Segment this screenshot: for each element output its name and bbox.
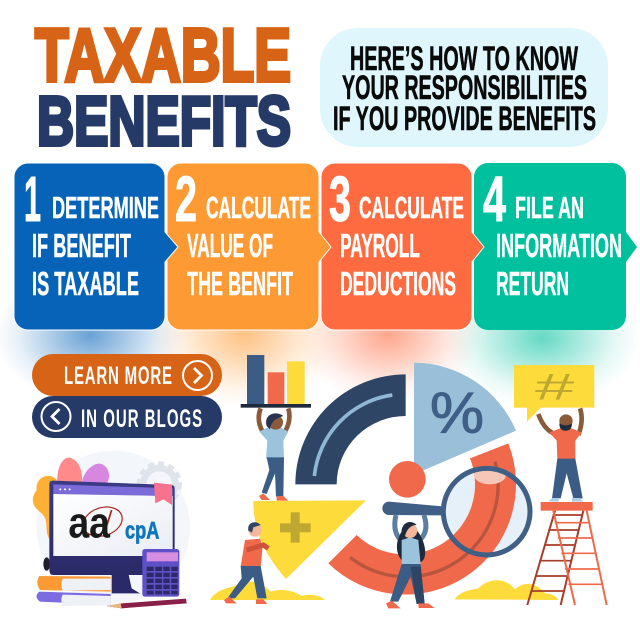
ground mounds	[210, 580, 558, 600]
yellow shield with plus	[253, 500, 366, 579]
background glow under step panels	[0, 263, 640, 407]
person on ladder holding speech bubble	[538, 408, 583, 502]
panel: step 4 file an information return: 4	[483, 163, 506, 235]
panel: step 3 calculate payroll deductions: CALCULATE	[359, 190, 464, 225]
bar chart	[241, 355, 311, 408]
panel: step 2 calculate value of the benfit: THE BENFIT	[187, 265, 293, 302]
speech bubble with hash: #	[535, 365, 575, 407]
panel: step 4 file an information return: FILE AN	[515, 190, 584, 225]
illustration: team building charts	[210, 355, 607, 608]
person holding magnifier	[386, 515, 435, 608]
panel: step 3 calculate payroll deductions: 3	[329, 163, 351, 235]
panel: step 2 calculate value of the benfit: CALCULATE	[206, 190, 311, 225]
panel: step 2 calculate value of the benfit: VALUE OF	[187, 227, 273, 264]
panel: step 1 determine if benefit is taxable: DETERMINE	[52, 190, 159, 225]
person holding bar chart	[259, 408, 289, 501]
percent pie slice: %	[430, 382, 484, 446]
dark blue arc	[295, 374, 406, 484]
button: learn more: LEARN MORE	[64, 362, 172, 390]
percent pie slice	[414, 363, 516, 474]
button: learn more	[32, 354, 222, 396]
panel: step 2 calculate value of the benfit	[167, 163, 331, 330]
logo: aa cpa: cpA	[125, 518, 159, 545]
logo: aa cpa: aa	[68, 498, 110, 547]
magnifier lens	[444, 469, 529, 554]
panel: step 1 determine if benefit is taxable: IS TAXABLE	[32, 265, 139, 302]
panel: step 1 determine if benefit is taxable: IF BENEFIT	[32, 227, 131, 264]
button: in our blogs: IN OUR BLOGS	[81, 405, 202, 433]
panel: step 3 calculate payroll deductions	[321, 163, 484, 330]
panel: step 1 determine if benefit is taxable: 1	[24, 163, 41, 235]
subtitle callout	[320, 28, 608, 147]
magnifier	[382, 468, 530, 555]
button: in our blogs	[32, 396, 222, 438]
panel: step 1 determine if benefit is taxable	[14, 163, 178, 330]
panel: step 3 calculate payroll deductions: DEDUCTIONS	[340, 265, 456, 302]
panel: step 4 file an information return	[474, 163, 637, 330]
red ring	[328, 443, 516, 595]
person pushing shield	[224, 522, 268, 604]
panel: step 2 calculate value of the benfit: 2	[175, 163, 197, 235]
panel: step 4 file an information return: RETURN	[496, 265, 569, 302]
title	[35, 13, 291, 160]
ladder	[527, 502, 607, 605]
logo: aa cpa	[68, 498, 159, 547]
title: BENEFITS	[37, 82, 291, 160]
illustration: computer with logo, books and calculator	[33, 451, 190, 608]
title: TAXABLE	[35, 13, 291, 97]
red circle	[389, 461, 426, 498]
speech bubble with hash	[514, 365, 594, 422]
panel: step 3 calculate payroll deductions: PAYROLL	[340, 227, 420, 264]
